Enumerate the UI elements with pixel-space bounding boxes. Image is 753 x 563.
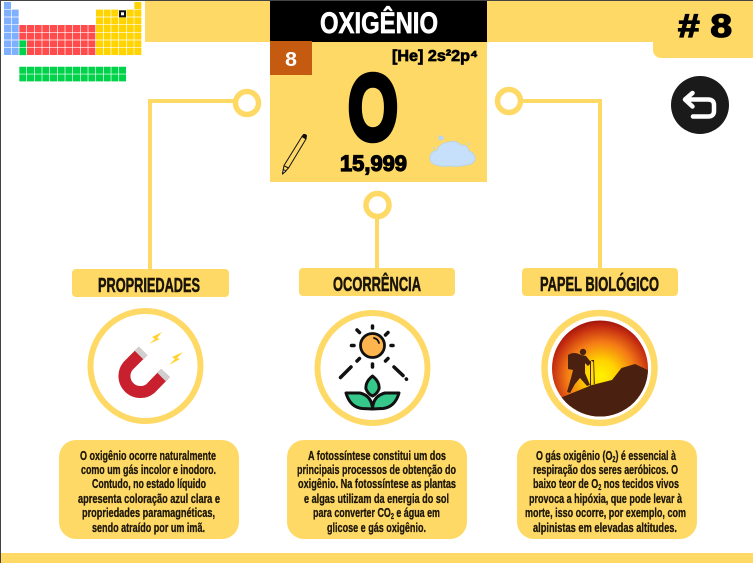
element symbol: O [348,56,398,160]
text block: ocorrência: A fotossíntese constitui um dos [308,448,446,463]
heading: papel biológico: PAPEL BIOLÓGICO [540,272,659,296]
atomic number: 8 [285,49,297,71]
heading: propriedades: PROPRIEDADES [98,275,200,297]
icon: cloud [430,135,475,166]
electron configuration: [He] 2s²2p⁴ [392,48,478,65]
text block: propriedades: sendo atraído por um imã. [92,520,205,535]
text block: papel biológico: provoca a hipóxia, que pode levar à [529,491,683,506]
text block: propriedades: O oxigênio ocorre naturalmente [80,448,216,463]
heading: ocorrência [299,268,455,296]
icon: sun and plant [318,313,428,423]
text block: ocorrência: oxigênio. Na fotossíntese as plantas [298,476,456,491]
text block: ocorrência [287,440,467,539]
connector: ocorrência [366,194,389,268]
text block: ocorrência: para converter CO [313,505,426,520]
text block: ocorrência: e água em [394,505,440,520]
text block: papel biológico: nos tecidos vivos [601,476,679,491]
text block: papel biológico: respiração dos seres aeróbicos. O [533,462,678,477]
bottom band [1,553,753,563]
element title bar: OXIGÊNIO [320,6,438,40]
text block: ocorrência: 2 [391,512,394,521]
text block: papel biológico: 2 [598,483,602,492]
text block: papel biológico: ) é essencial à [615,448,677,463]
header band right [487,1,753,58]
element title bar [270,1,487,42]
icon: magnet [90,311,200,421]
plant [346,376,399,409]
header band left [145,1,270,42]
text block: papel biológico: morte, isso ocorre, por exemplo, com [525,505,686,520]
text block: propriedades: apresenta coloração azul clara e [78,491,220,506]
text block: propriedades: propriedades paramagnéticas, [82,505,215,520]
heading: papel biológico [522,268,678,296]
text block: propriedades: Contudo, no estado líquido [92,476,206,491]
text block: papel biológico: O gás oxigênio (O [536,448,647,463]
text block: ocorrência: glicose e gás oxigênio. [327,520,426,535]
text block: propriedades [59,440,239,539]
text block: papel biológico: baixo teor de O [533,476,628,491]
icon: back button [671,76,729,134]
periodic table [8,2,138,78]
text block: papel biológico: 2 [612,455,616,464]
text block: ocorrência: e algas utilizam da energia do sol [304,491,449,506]
connector: propriedades [150,92,258,270]
element index number: # 8 [678,8,732,44]
text block: papel biológico [517,440,697,539]
sun [340,326,406,379]
heading: ocorrência: OCORRÊNCIA [333,272,421,296]
element card [270,41,487,182]
icon: alpinist at sunset [544,313,654,423]
text block: propriedades: como um gás incolor e inodoro. [81,462,216,477]
atomic number [270,41,312,75]
heading: propriedades [72,269,229,297]
connector: papel biológico [498,90,600,268]
icon: pencil [282,134,306,174]
atomic mass: 15,999 [340,151,407,176]
text block: ocorrência: principais processos de obtenção do [297,462,456,477]
text block: papel biológico: alpinistas em elevadas altitudes. [533,520,677,535]
